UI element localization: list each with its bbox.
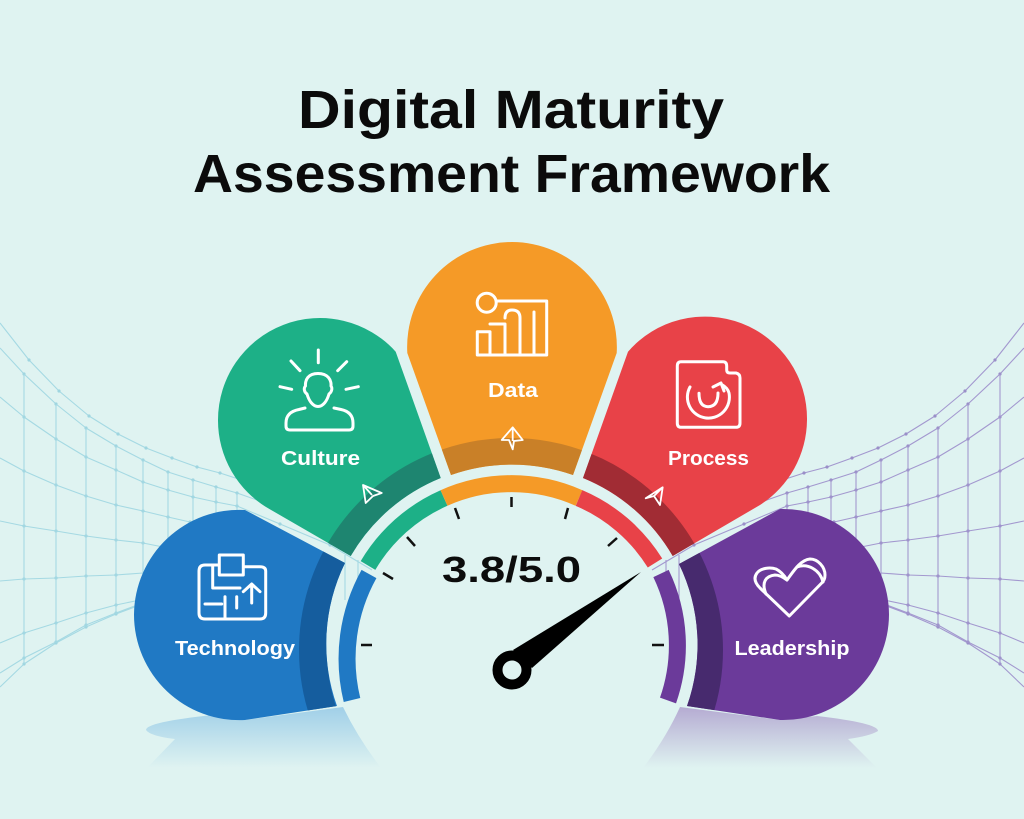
panel: culture <box>218 318 441 556</box>
label: data: Data <box>488 380 539 402</box>
shadow: right reflection <box>643 707 878 768</box>
gauge: colored scale arcs <box>347 484 677 700</box>
icon: technology blueprint <box>199 555 266 619</box>
gauge value: 3.8/5.0 <box>442 549 581 590</box>
label: technology: Technology <box>175 638 296 660</box>
label: culture: Culture <box>281 448 360 470</box>
panel: data <box>407 242 617 475</box>
gauge interior disc <box>353 492 669 808</box>
title: Digital Maturity <box>298 80 724 140</box>
shadow: left reflection <box>146 707 381 768</box>
label: process: Process <box>668 448 749 470</box>
title: Assessment Framework <box>193 144 831 204</box>
arrow: culture pointer <box>363 485 382 503</box>
panel: leadership <box>679 509 889 720</box>
icon: heart <box>755 559 825 616</box>
icon: person with rays <box>280 350 358 430</box>
gauge: tick marks <box>361 497 664 645</box>
gauge needle <box>498 572 641 684</box>
panel: process <box>583 316 807 556</box>
icon: document with cycle <box>677 362 740 427</box>
label: leadership: Leadership <box>734 638 850 660</box>
arrow: data pointer <box>502 427 523 449</box>
panel: technology <box>134 510 345 720</box>
left perspective grid <box>0 323 372 687</box>
right perspective grid <box>652 323 1024 687</box>
arrow: process pointer <box>646 487 663 505</box>
icon: bar chart <box>477 293 547 355</box>
title <box>193 80 831 204</box>
